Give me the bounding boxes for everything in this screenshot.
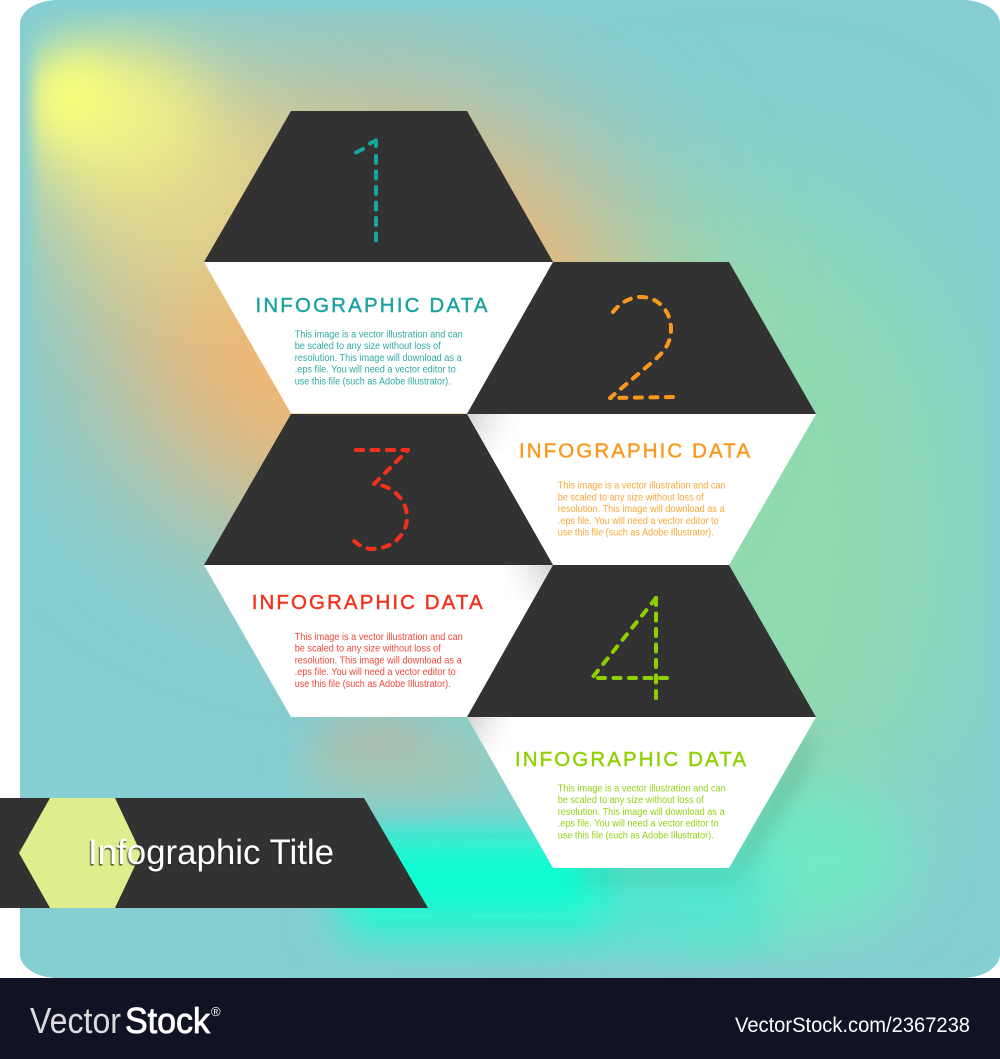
body text 4 xyxy=(558,784,726,841)
body text 1: .eps file. You will need a vector editor to xyxy=(295,365,456,376)
white panel 1 xyxy=(204,262,553,414)
title banner xyxy=(0,798,428,908)
hexagon 2 xyxy=(467,262,816,565)
body text 2: .eps file. You will need a vector editor to xyxy=(558,516,719,527)
number 3 xyxy=(351,450,408,549)
body text 1: This image is a vector illustration and can xyxy=(295,330,463,340)
title text: Infographic Title xyxy=(88,833,334,872)
heading 3: INFOGRAPHIC DATA xyxy=(252,591,483,614)
number 1 xyxy=(356,140,376,241)
body text 1: be scaled to any size without loss of xyxy=(295,341,441,352)
body text 3: use this file (such as Adobe Illustrator). xyxy=(295,679,451,690)
brand logo: Stock xyxy=(125,1000,211,1041)
heading 4: INFOGRAPHIC DATA xyxy=(515,748,746,771)
corner shadow 3 xyxy=(490,565,553,600)
corner shadow 4 xyxy=(467,717,525,752)
body text 1: use this file (such as Adobe Illustrator). xyxy=(295,376,451,387)
body text 1: resolution. This image will download as a xyxy=(295,353,462,364)
hexagon badge xyxy=(19,798,141,908)
white panel 2 xyxy=(467,414,816,565)
registered mark: ® xyxy=(211,1004,221,1019)
footer bar xyxy=(0,978,1000,1059)
body text 2: resolution. This image will download as a xyxy=(558,504,725,515)
hexagon 4 xyxy=(467,565,816,868)
body text 1 xyxy=(295,330,463,387)
number 4 xyxy=(592,598,668,699)
brand logo xyxy=(30,1000,211,1041)
body text 4: be scaled to any size without loss of xyxy=(558,795,704,806)
hexagon 4 drop shadow xyxy=(575,718,816,882)
white panel 3 xyxy=(204,565,553,717)
image id: VectorStock.com/2367238 xyxy=(735,1014,970,1037)
heading 1: INFOGRAPHIC DATA xyxy=(256,294,488,317)
dark panel 3 xyxy=(204,414,553,565)
body text 3: .eps file. You will need a vector editor to xyxy=(295,667,456,678)
body text 3: be scaled to any size without loss of xyxy=(295,644,441,655)
body text 2: be scaled to any size without loss of xyxy=(558,492,704,503)
footer background xyxy=(0,978,1000,1059)
corner shadow 2 xyxy=(467,414,530,450)
dark panel 1 xyxy=(204,111,553,262)
dark panel 2 xyxy=(467,262,816,414)
body text 2: This image is a vector illustration and can xyxy=(558,481,726,492)
body text 4: use this file (such as Adobe Illustrator). xyxy=(558,830,714,841)
brand logo: Vector xyxy=(30,1000,121,1041)
hexagon 1 xyxy=(204,111,553,414)
title text shadow: Infographic Title xyxy=(87,834,333,874)
white panel 4 xyxy=(467,717,816,868)
number 2 xyxy=(610,297,673,398)
body text 3: This image is a vector illustration and can xyxy=(295,632,463,643)
body text 3 xyxy=(295,632,463,690)
body text 3: resolution. This image will download as a xyxy=(295,656,462,666)
banner shape xyxy=(0,798,428,908)
body text 4: This image is a vector illustration and can xyxy=(558,784,726,794)
heading 2: INFOGRAPHIC DATA xyxy=(519,440,750,463)
body text 4: .eps file. You will need a vector editor to xyxy=(558,819,719,830)
dark panel 4 xyxy=(467,565,816,717)
body text 2 xyxy=(558,481,726,539)
body text 2: use this file (such as Adobe Illustrator). xyxy=(558,528,714,539)
hexagon 3 xyxy=(204,414,553,717)
body text 4: resolution. This image will download as a xyxy=(558,807,725,818)
